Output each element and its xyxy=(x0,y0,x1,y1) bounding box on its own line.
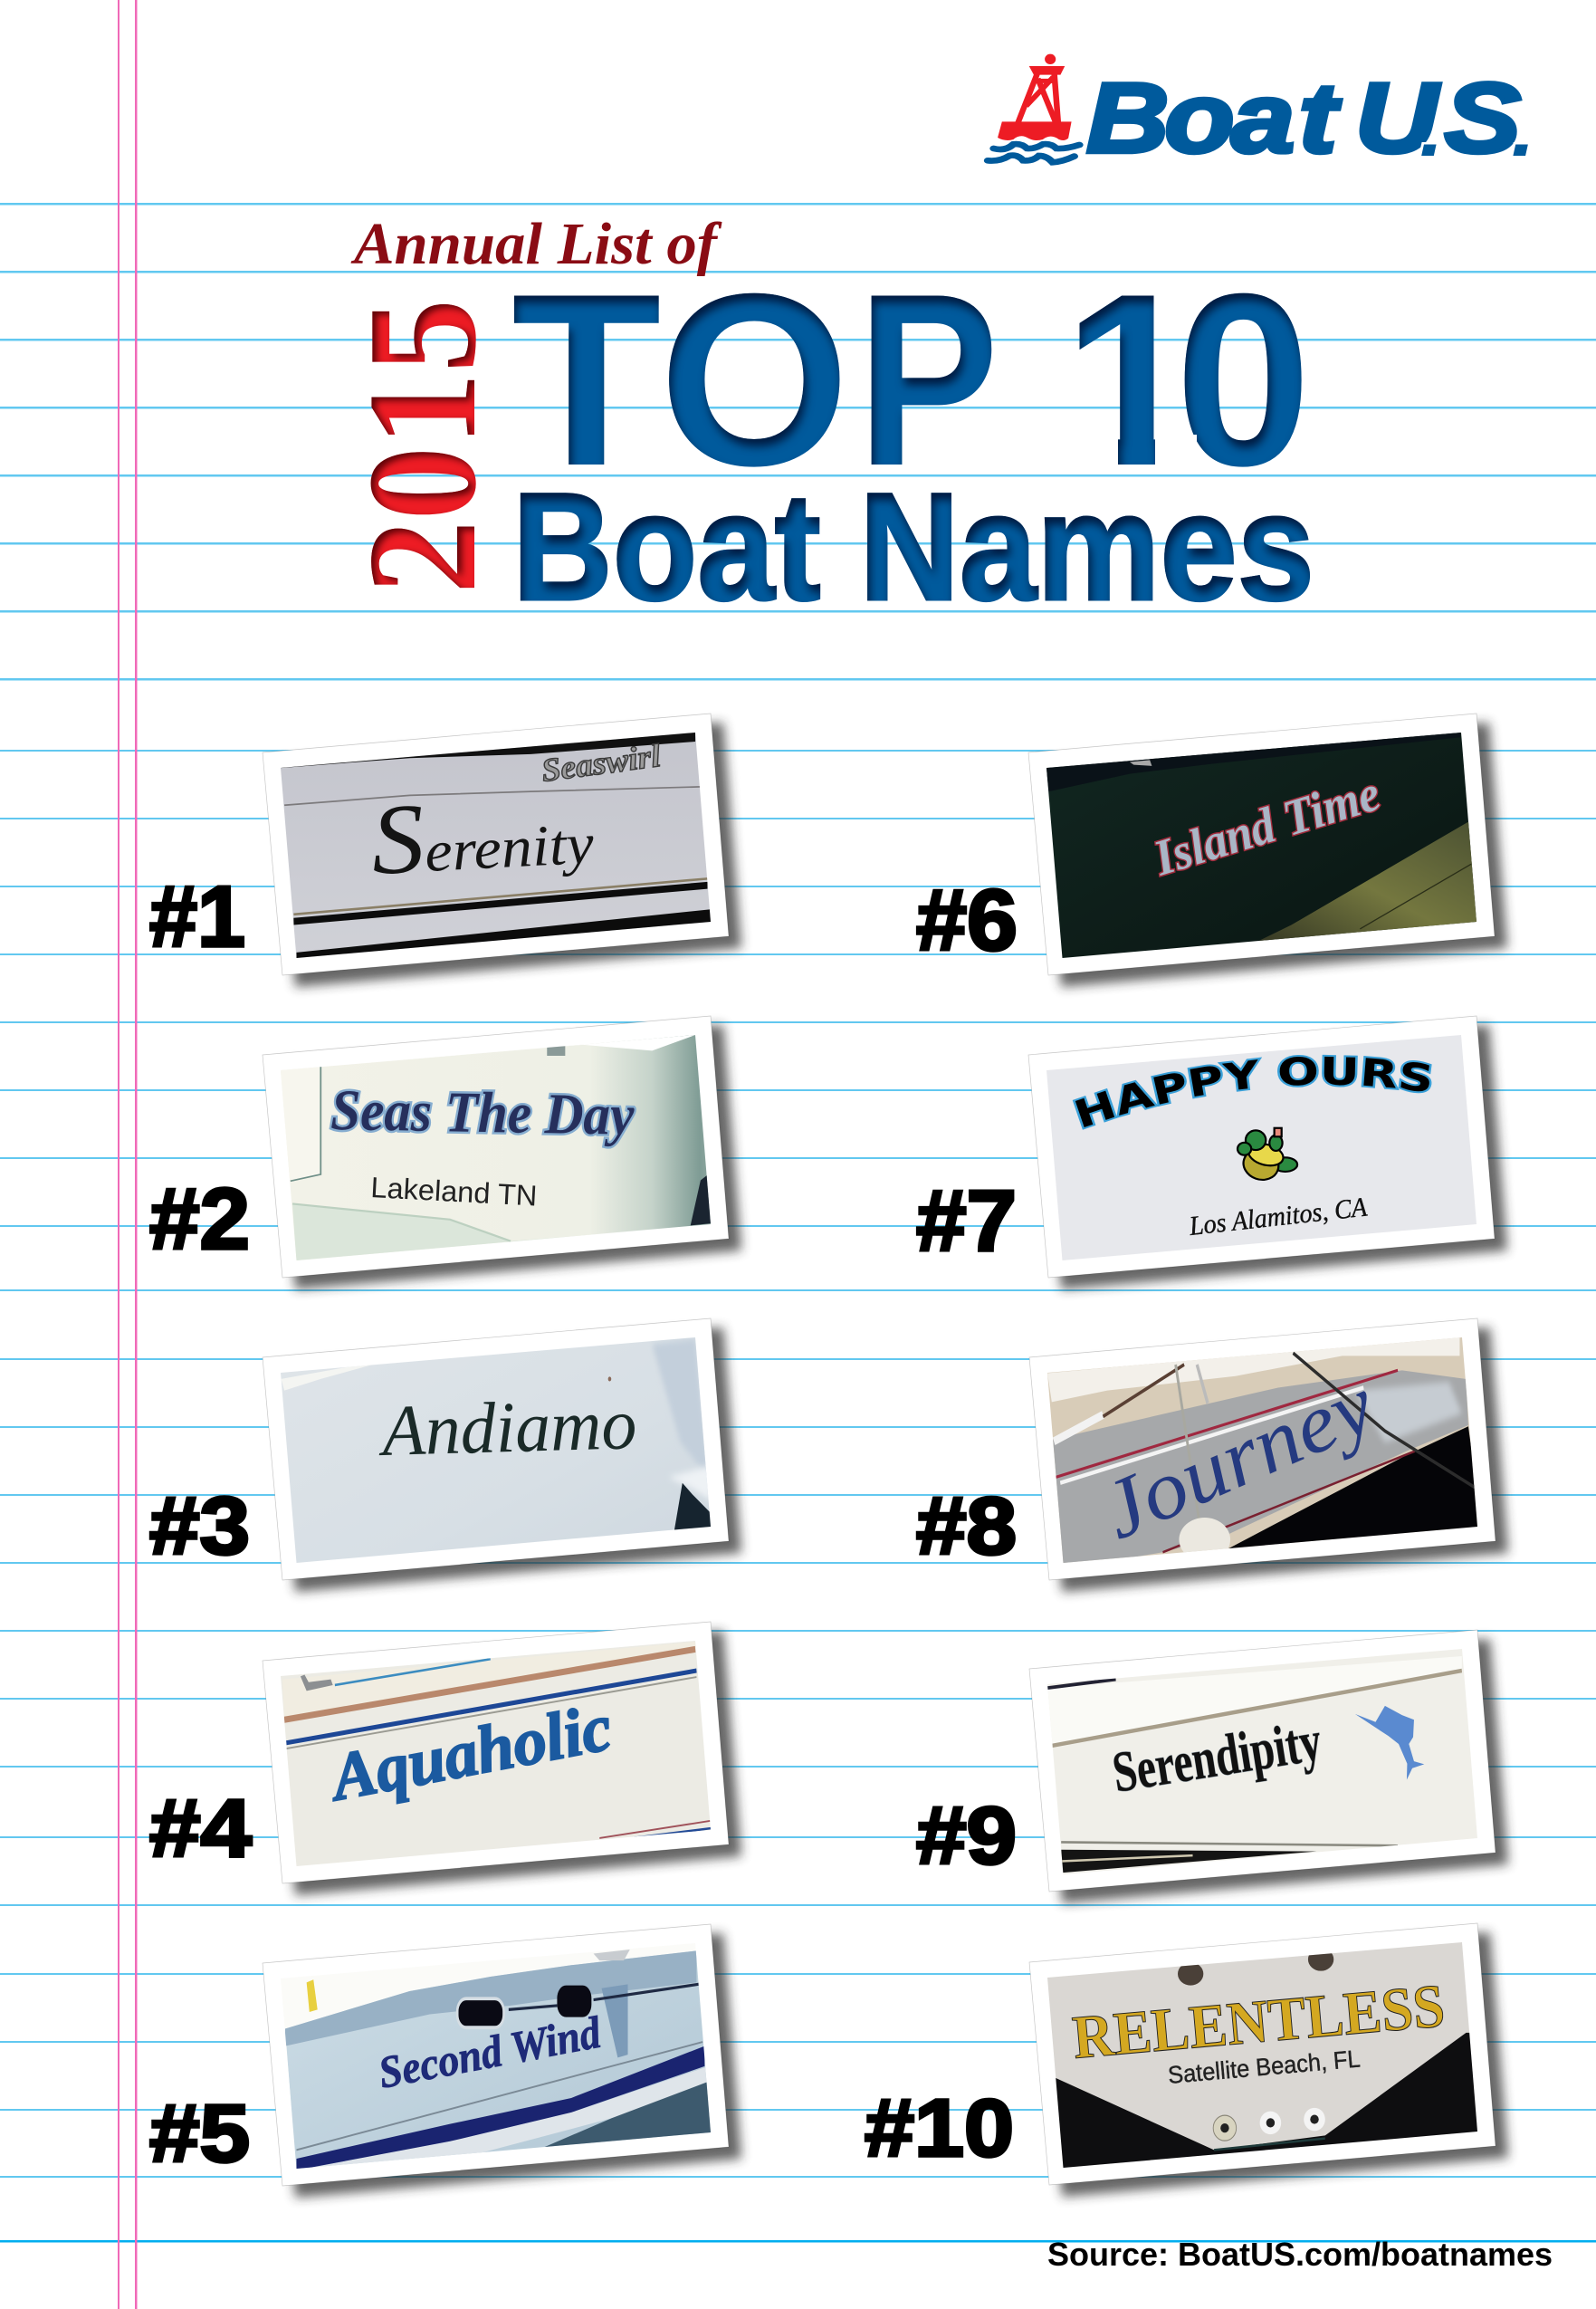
logo: BoatU.S. xyxy=(988,54,1535,174)
photo card: Serendipity xyxy=(1020,1630,1508,1903)
photo card: Aquaholic xyxy=(253,1622,741,1895)
photo card: Second Wind xyxy=(253,1924,741,2198)
entry: #3 Andiamo xyxy=(149,1318,741,1592)
title: TOP 10: 1 xyxy=(1063,244,1199,517)
rank number 4: #4 xyxy=(149,1784,252,1874)
title: 2015 rotated: 2015 xyxy=(337,299,509,594)
boat name: Island Time: Island Time xyxy=(1147,765,1387,887)
entry: #8 Journey xyxy=(916,1318,1508,1592)
entry: #10 Relentless xyxy=(865,1923,1508,2197)
photo card: Andiamo xyxy=(253,1318,741,1592)
entry: #2 Seas The Day xyxy=(149,1016,741,1289)
photo card: Serenity xyxy=(253,714,741,987)
title: Boat Names: Boat Names xyxy=(512,461,1314,632)
title: TOP 10: 0 xyxy=(1175,244,1312,517)
icon: red buoy with waves xyxy=(988,54,1079,162)
photo card: Seas The Day xyxy=(253,1016,741,1289)
home port: Lakeland TN: Lakeland TN xyxy=(370,1171,538,1212)
boat name: Journey: Journey xyxy=(1088,1357,1388,1557)
entry: #4 Aquaholic xyxy=(149,1622,741,1895)
boat name: RELENTLESS: RELENTLESS xyxy=(1070,1970,1448,2072)
logo wordmark: S xyxy=(1445,63,1521,174)
source credit: Source: BoatUS.com/boatnames xyxy=(1047,2236,1553,2273)
entry: #7 Happy Ours xyxy=(916,1016,1515,1297)
badge text: Seaswirl: Seaswirl xyxy=(540,737,663,789)
boat name: Second Wind: Second Wind xyxy=(375,2007,606,2098)
hull stripes xyxy=(282,732,711,958)
hull highlights xyxy=(282,1338,711,1530)
boat name: Aquaholic: Aquaholic xyxy=(322,1691,617,1816)
photo card: Happy Ours xyxy=(1028,1016,1515,1297)
photo card: Journey xyxy=(1020,1318,1508,1592)
rank number 1: #1 xyxy=(149,868,245,965)
hull, stripes, ropes and fender xyxy=(1047,1336,1483,1569)
hull stripes xyxy=(1047,1656,1462,1873)
rank number 6: #6 xyxy=(916,872,1018,969)
rank number 2: #2 xyxy=(149,1171,250,1268)
rank number 10: #10 xyxy=(865,2084,1014,2174)
rank number 8: #8 xyxy=(916,1481,1017,1572)
rank number 7: #7 xyxy=(916,1173,1017,1269)
boat name: Seas The Day: Seas The Day xyxy=(330,1078,635,1147)
boat name: HAPPY OURS arched: HAPPY OURS xyxy=(1072,1054,1432,1130)
boat name: Serenity: Serenity xyxy=(368,774,597,896)
logo wordmark: BoatU xyxy=(1086,63,1441,174)
icon: blue sailfish xyxy=(1355,1706,1424,1780)
hull, portholes and stripe xyxy=(285,1950,721,2176)
title: TOP 10: P xyxy=(857,244,995,517)
boat name: Serendipity: Serendipity xyxy=(1108,1708,1325,1805)
title: TOP 10: TO xyxy=(511,244,850,517)
logo wordmark: . xyxy=(1419,88,1444,173)
title: TOP 10 xyxy=(514,293,1302,467)
photo card: Island Time xyxy=(1019,714,1507,987)
entry: #9 Serendipity xyxy=(916,1630,1508,1903)
dark top edge and dock xyxy=(1046,732,1481,949)
entry: #6 Island Time xyxy=(916,714,1507,987)
home port: Los Alamitos, CA: Los Alamitos, CA xyxy=(1187,1192,1369,1241)
hull shapes xyxy=(276,1035,711,1265)
rank number 5: #5 xyxy=(149,2089,250,2180)
rank number 3: #3 xyxy=(149,1481,250,1572)
home port: Satellite Beach, FL: Satellite Beach, FL xyxy=(1167,2046,1362,2089)
title: Annual List of: Annual List of xyxy=(350,211,722,277)
entry: #5 Second Wind xyxy=(149,1924,741,2198)
rank number 9: #9 xyxy=(916,1791,1017,1882)
boat name: Andiamo: Andiamo xyxy=(377,1384,637,1471)
title block xyxy=(351,221,1311,603)
transom shapes and fittings xyxy=(1056,1948,1492,2193)
icon: turtle with drink xyxy=(1238,1128,1297,1184)
logo wordmark: . xyxy=(1511,88,1535,173)
hull stripes and cleat xyxy=(282,1642,711,1838)
photo card: Relentless xyxy=(1020,1923,1508,2197)
entry: #1 Serenity xyxy=(149,714,741,987)
